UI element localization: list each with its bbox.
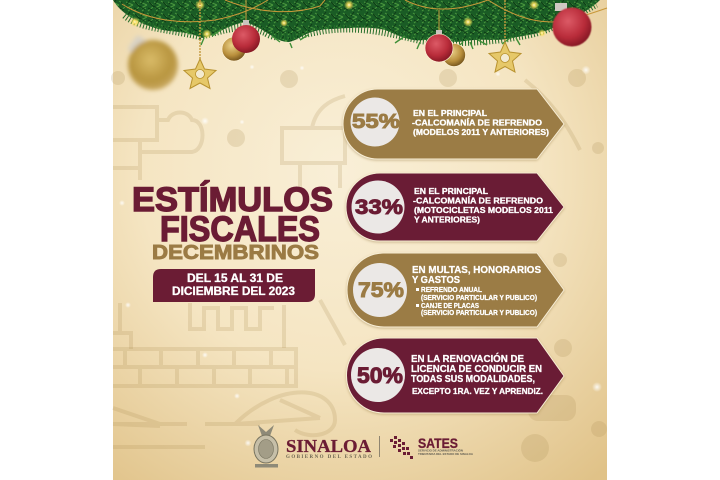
badge: 75%: REFRENDO ANUAL [421,287,483,294]
badge: 55%: 55% [352,110,400,133]
badge: 55% [343,89,564,159]
badge: 75% [347,253,564,327]
badge: 55%: (MODELOS 2011 Y ANTERIORES) [413,127,549,137]
badge: 50%: TODAS SUS MODALIDADES, [411,374,535,385]
subtitle: DECEMBRINOS: DECEMBRINOS [152,242,319,264]
badge: 50% [346,338,564,413]
pine garland [113,0,600,49]
badge: 33%: EN EL PRINCIPAL [414,186,488,196]
ornament: gold and red baubles left [222,0,260,61]
date banner [153,269,315,302]
badge: 75%: 75% [358,278,404,302]
badge: 75%: Y GASTOS [412,274,460,286]
badge: 55%: -CALCOMANÍA DE REFRENDO [412,118,542,128]
logo: SATES wordmark: TRIBUTARIA DEL ESTADO DE SINALOA [418,452,473,456]
date banner: DEL 15 AL 31 DE [187,273,283,285]
badge: 75%: (SERVICIO PARTICULAR Y PUBLICO) [421,295,537,302]
logo: SATES wordmark: SATES [418,436,458,451]
logo: SATES wordmark [418,436,473,456]
logo: Sinaloa wordmark: SINALOA [286,436,371,456]
badge: 75%: (SERVICIO PARTICULAR Y PUBLICO) [421,310,537,317]
badge: 55%: EN EL PRINCIPAL [413,108,487,118]
badge: 33% [346,173,564,241]
ornament: hanging star left [184,0,216,88]
badge: 50%: EXCEPTO 1RA. VEZ Y APRENDIZ. [412,386,543,396]
badge: 33%: (MOTOCICLETAS MODELOS 2011 [414,205,553,215]
title line: FISCALES: FISCALES [160,210,320,249]
background panel [113,0,607,480]
ornament: large red bauble [552,3,592,46]
badge: 75%: CANJE DE PLACAS [421,303,479,310]
badge: 33%: Y ANTERIORES) [414,214,480,224]
badge: 33%: -CALCOMANÍA DE REFRENDO [413,196,543,206]
badge: 33%: 33% [355,195,403,219]
logo: Sinaloa wordmark: GOBIERNO DEL ESTADO [286,455,372,460]
ornament: gold and red baubles right [425,10,466,66]
faint line-art illustration [113,80,580,447]
heading [132,181,333,264]
logo: SATES pixel mark [390,436,413,459]
gold tinsel strands [122,0,607,22]
logo: Sinaloa coat of arms [254,425,278,468]
logo: SATES wordmark: SERVICIO DE ADMINISTRACIÓN [418,448,463,452]
date banner: DICIEMBRE DEL 2023 [172,286,295,298]
badge: 50%: LICENCIA DE CONDUCIR EN [411,364,542,375]
badge: 75%: EN MULTAS, HONORARIOS [412,264,541,276]
badge: 50%: 50% [357,363,403,388]
sparkles [119,64,602,446]
ornament: hanging star right [489,0,521,72]
divider [379,436,380,457]
faint decorative dots [111,69,607,462]
ornament: blurred gold bauble [127,35,178,90]
string lights [130,0,546,39]
badge: 50%: EN LA RENOVACIÓN DE [411,352,524,365]
title line: ESTÍMULOS: ESTÍMULOS [132,181,333,219]
